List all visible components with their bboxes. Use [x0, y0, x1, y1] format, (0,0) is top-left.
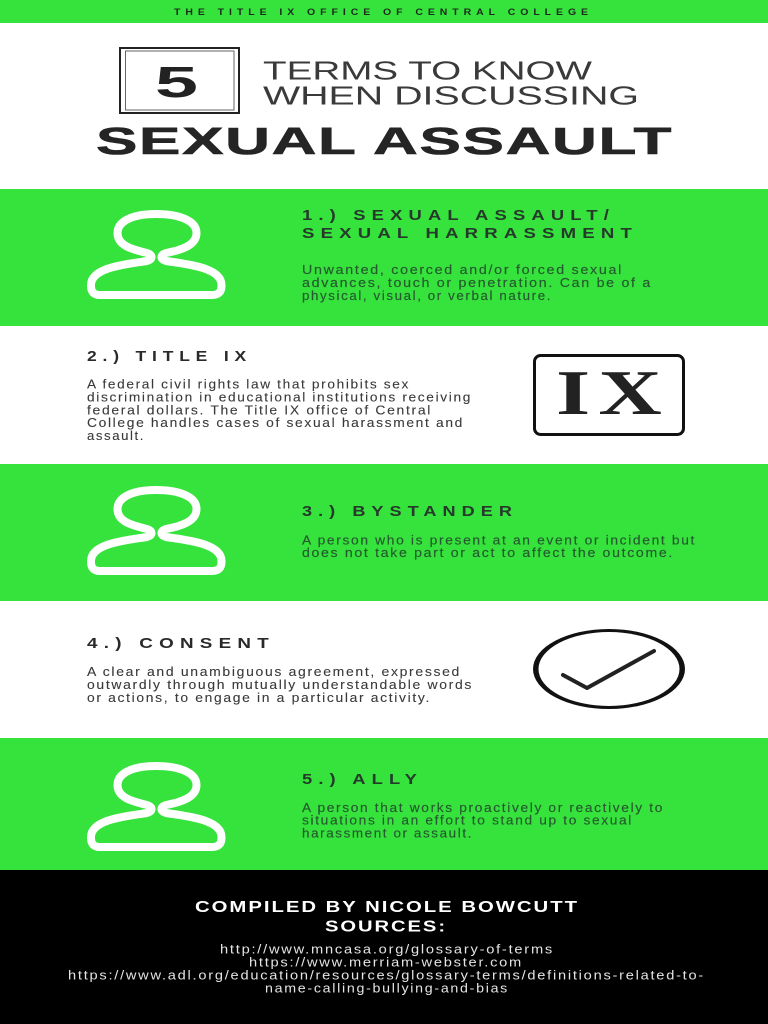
heading: compiled by and sources: SOURCES:: [325, 918, 447, 936]
subtitle: WHEN DISCUSSING: [263, 80, 639, 110]
text: term 2 definition: College handles cases of sexual harassment and: [87, 416, 464, 430]
text: term 3 definition: [302, 534, 696, 560]
text: term 4 definition: or actions, to engage in a particular activity.: [87, 691, 431, 705]
panel: term 3 bystander: [0, 464, 768, 601]
text: term 1 definition: advances, touch or penetration. Can be of a: [302, 276, 652, 290]
panel: term 2 title ix: [0, 326, 768, 464]
top banner: THE TITLE IX OFFICE OF CENTRAL COLLEGE: [174, 7, 593, 18]
text: source links: https://www.merriam-webster.com: [249, 956, 523, 970]
number 5 box: 5: [155, 58, 198, 107]
text: term 4 definition: [87, 665, 473, 705]
heading: term 1: SEXUAL HARRASSMENT: [302, 225, 638, 242]
text: term 5 definition: situations in an effort to stand up to sexual: [302, 814, 633, 828]
text: term 1 definition: Unwanted, coerced and/or forced sexual: [302, 263, 623, 277]
text: source links: https://www.adl.org/education/resources/glossary-terms/definitions-related-to-: [68, 968, 705, 982]
text: term 4 definition: A clear and unambiguous agreement, expressed: [87, 665, 461, 679]
icon: person outline: [91, 490, 222, 571]
heading: term 1: 1.) SEXUAL ASSAULT/: [302, 207, 615, 224]
icon: person outline: [91, 766, 222, 847]
main title: SEXUAL ASSAULT: [96, 121, 673, 163]
title block: [96, 48, 673, 163]
text: source links: name-calling-bullying-and-bias: [265, 982, 509, 996]
icon: IX sign: IX: [556, 357, 670, 428]
heading: term 1: [302, 207, 638, 242]
heading: term 3: 3.) BYSTANDER: [302, 503, 518, 520]
subtitle: [263, 56, 639, 110]
heading: term 4: 4.) CONSENT: [87, 635, 275, 652]
text: term 3 definition: does not take part or act to affect the outcome.: [302, 546, 674, 560]
text: source links: http://www.mncasa.org/glossary-of-terms: [220, 942, 554, 956]
text: term 1 definition: [302, 263, 652, 303]
heading: compiled by and sources: [195, 899, 579, 936]
heading: compiled by and sources: COMPILED BY NICOLE BOWCUTT: [195, 899, 579, 916]
text: term 2 definition: A federal civil rights law that prohibits sex: [87, 378, 410, 392]
text: term 5 definition: A person that works proactively or reactively to: [302, 801, 664, 815]
panel: term 5 ally: [0, 738, 768, 870]
text: term 1 definition: physical, visual, or verbal nature.: [302, 289, 552, 303]
icon: person outline: [91, 214, 222, 295]
subtitle: TERMS TO KNOW: [263, 56, 593, 86]
heading: term 2: 2.) TITLE IX: [87, 348, 252, 365]
text: term 2 definition: [87, 378, 472, 443]
icon: IX sign: [534, 356, 684, 434]
text: term 4 definition: outwardly through mutually understandable words: [87, 678, 473, 692]
number 5 box: [120, 48, 239, 113]
text: term 3 definition: A person who is present at an event or incident but: [302, 534, 696, 548]
icon: check mark in circle: [533, 629, 685, 709]
heading: term 5: 5.) ALLY: [302, 771, 423, 788]
text: term 2 definition: assault.: [87, 429, 145, 443]
text: term 5 definition: harassment or assault.: [302, 826, 473, 840]
text: term 2 definition: federal dollars. The Title IX office of Central: [87, 404, 432, 418]
text: term 5 definition: [302, 801, 664, 840]
text: source links: [68, 942, 705, 996]
top banner: [0, 0, 768, 23]
panel: footer sources: [0, 870, 768, 1024]
text: term 2 definition: discrimination in educational institutions receiving: [87, 390, 472, 404]
panel: term 4 consent: [0, 601, 768, 738]
panel: term 1 sexual assault: [0, 189, 768, 326]
